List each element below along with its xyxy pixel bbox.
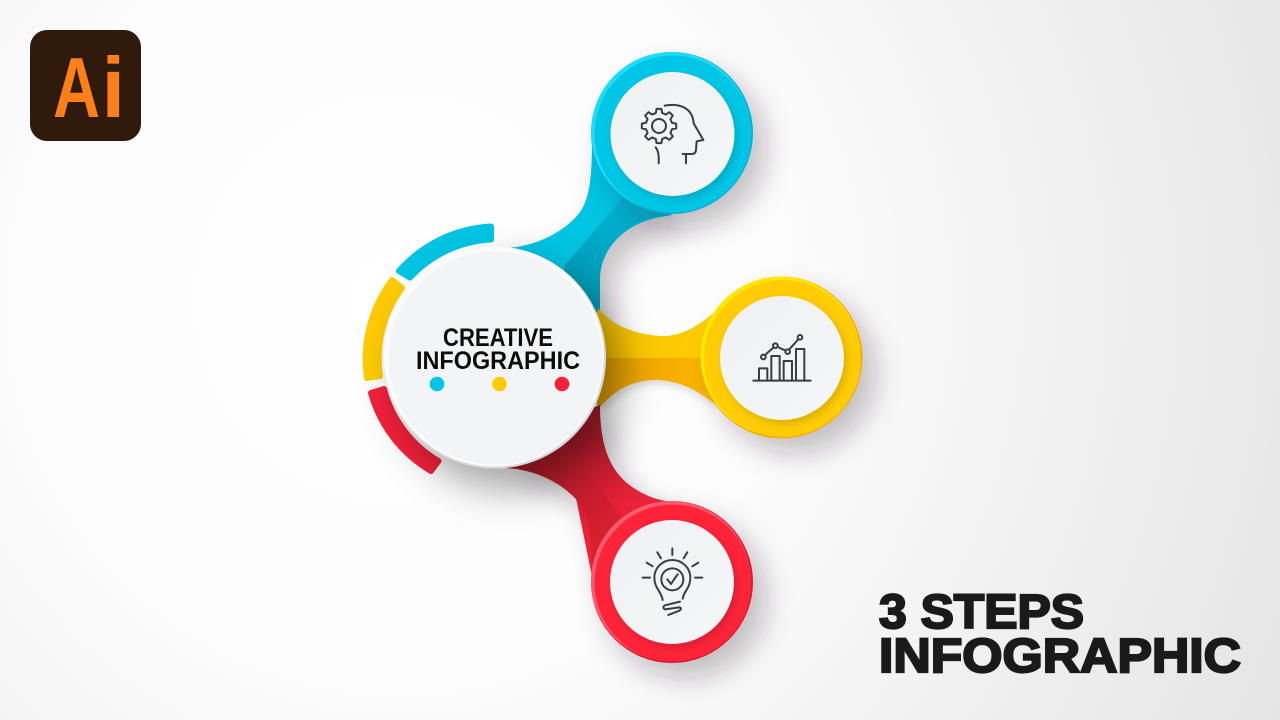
icon: head with gear — [642, 105, 703, 163]
connector: yellow branch — [590, 308, 730, 410]
inner disc red — [610, 520, 734, 644]
logo: Adobe Illustrator: A — [53, 41, 100, 136]
heading: 3 steps infographic: 3 STEPS — [879, 586, 1084, 639]
logo: Adobe Illustrator: i — [102, 41, 125, 136]
step colour dots — [430, 377, 569, 391]
icon: light bulb with check — [643, 548, 702, 615]
inner disc yellow — [720, 296, 844, 420]
central disc — [384, 246, 606, 468]
inner disc blue — [610, 72, 734, 196]
arc segment: red — [371, 389, 438, 471]
step 2: yellow node — [700, 276, 862, 438]
connector: blue branch — [505, 140, 672, 320]
heading: 3 steps infographic — [879, 586, 1241, 683]
heading: 3 steps infographic: INFOGRAPHIC — [879, 630, 1241, 683]
step 3: red node — [591, 501, 753, 663]
arc segment: yellow — [366, 280, 402, 378]
arc segment: blue — [399, 226, 491, 278]
central title: CREATIVE — [443, 324, 553, 352]
icon: bar chart with trend line — [753, 335, 811, 381]
logo: Adobe Illustrator — [30, 30, 141, 141]
central title — [416, 324, 580, 375]
step 1: blue node — [591, 52, 753, 214]
connector: red branch — [505, 405, 672, 576]
central title: INFOGRAPHIC — [416, 347, 580, 375]
